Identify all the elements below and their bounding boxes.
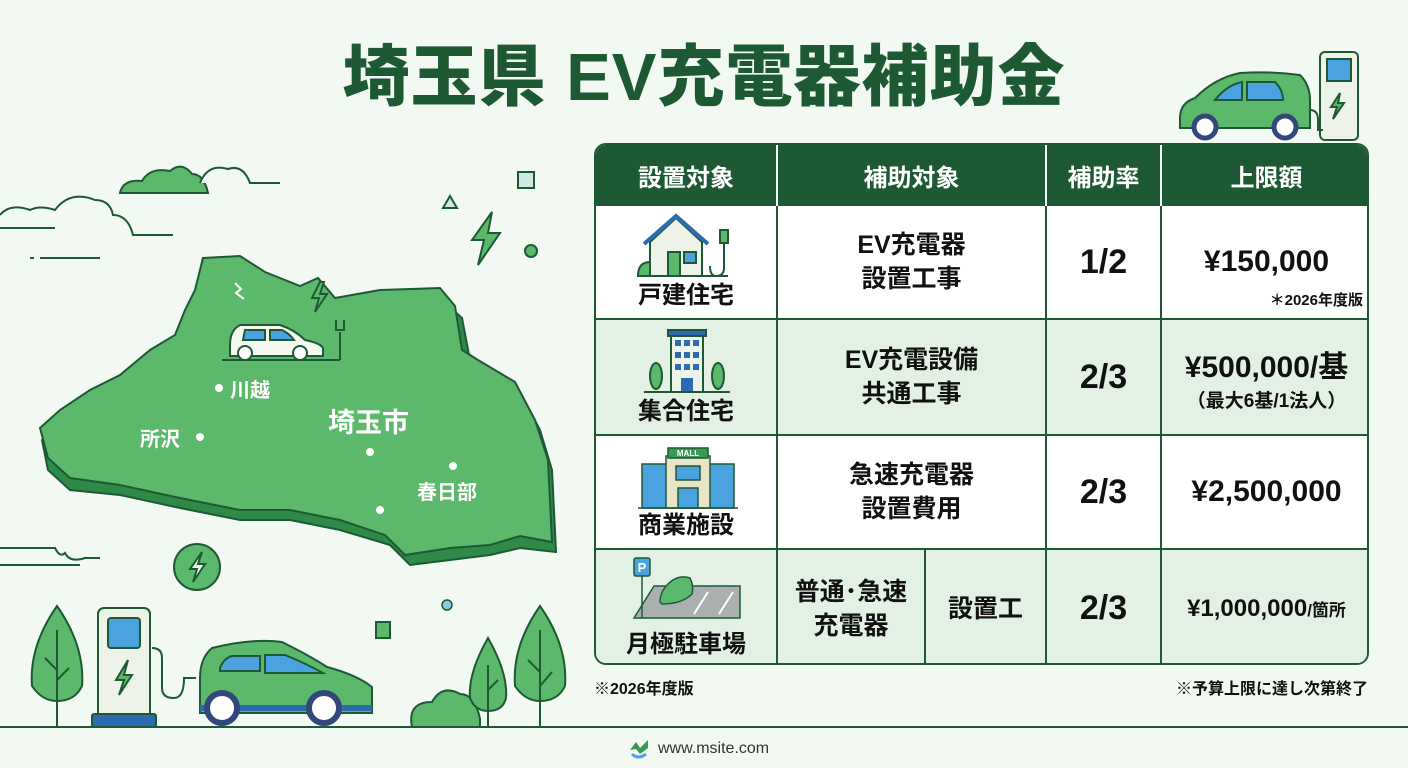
row: detached house: EV充電器 (857, 231, 966, 259)
row: apartment: ¥500,000/基 (1185, 350, 1348, 384)
row: apartment: 2/3 (1080, 358, 1127, 396)
row: parking: 2/3 (1080, 589, 1127, 627)
map labels: 川越 (230, 379, 270, 402)
car bottom (200, 641, 372, 723)
map labels (140, 379, 477, 514)
icon: house (637, 214, 729, 277)
map car (222, 282, 344, 360)
row: commercial: 2/3 (1080, 472, 1127, 510)
title: 埼玉県 EV充電器補助金 (342, 40, 1066, 115)
icon: parking (632, 557, 741, 619)
row: commercial: 設置費用 (861, 495, 962, 523)
icon: logo (630, 740, 648, 758)
icon: apartment building (644, 329, 730, 393)
header row (596, 145, 1367, 206)
map labels: 所沢 (140, 428, 180, 451)
row: detached house: 戸建住宅 (638, 282, 734, 309)
trees (32, 606, 565, 727)
row: detached house (596, 206, 1367, 320)
row: parking: 充電器 (813, 612, 888, 640)
icon: mall (638, 447, 738, 509)
row: parking: ¥1,000,000/箇所 (1187, 594, 1346, 622)
row: apartment: 集合住宅 (638, 398, 734, 425)
row: parking: 月極駐車場 (626, 631, 746, 658)
row: apartment: EV充電設備 (845, 346, 978, 374)
header row: 設置対象 (638, 165, 734, 192)
clouds (0, 167, 280, 565)
table: subsidy (594, 143, 1369, 665)
note right: ※予算上限に達し次第終了 (1176, 681, 1368, 698)
row: apartment: （最大6基/1法人） (1187, 390, 1346, 412)
top right car & charger (1180, 52, 1358, 140)
row: commercial (596, 436, 1367, 550)
footer: www.msite.com (658, 740, 769, 757)
ground line (0, 726, 1408, 728)
icon: mall: MALL (677, 449, 699, 458)
icon: parking: P (638, 560, 647, 575)
bolt circle (174, 544, 220, 590)
header row: 補助率 (1068, 165, 1140, 192)
note left: ※2026年度版 (594, 681, 694, 698)
row: detached house: 設置工事 (861, 265, 962, 293)
header row: 上限額 (1230, 165, 1302, 192)
row: detached house: ＊2026年度版 (1270, 292, 1363, 309)
row: apartment: 共通工事 (861, 380, 962, 408)
decorations (518, 172, 534, 188)
charger bottom (92, 608, 196, 727)
row: commercial: 急速充電器 (849, 461, 974, 489)
row: apartment (596, 320, 1367, 436)
row: parking (596, 550, 1367, 663)
map: saitama (40, 256, 556, 565)
row: parking: 普通･急速 (795, 578, 907, 606)
row: parking: 設置工 (948, 594, 1023, 622)
row: detached house: ¥150,000 (1204, 245, 1329, 278)
row: commercial: 商業施設 (638, 512, 734, 539)
row: commercial: ¥2,500,000 (1191, 475, 1342, 508)
map labels: 埼玉市 (328, 408, 409, 438)
row: detached house: 1/2 (1080, 242, 1127, 280)
map labels: 春日部 (417, 481, 477, 504)
header row: 補助対象 (864, 165, 960, 192)
